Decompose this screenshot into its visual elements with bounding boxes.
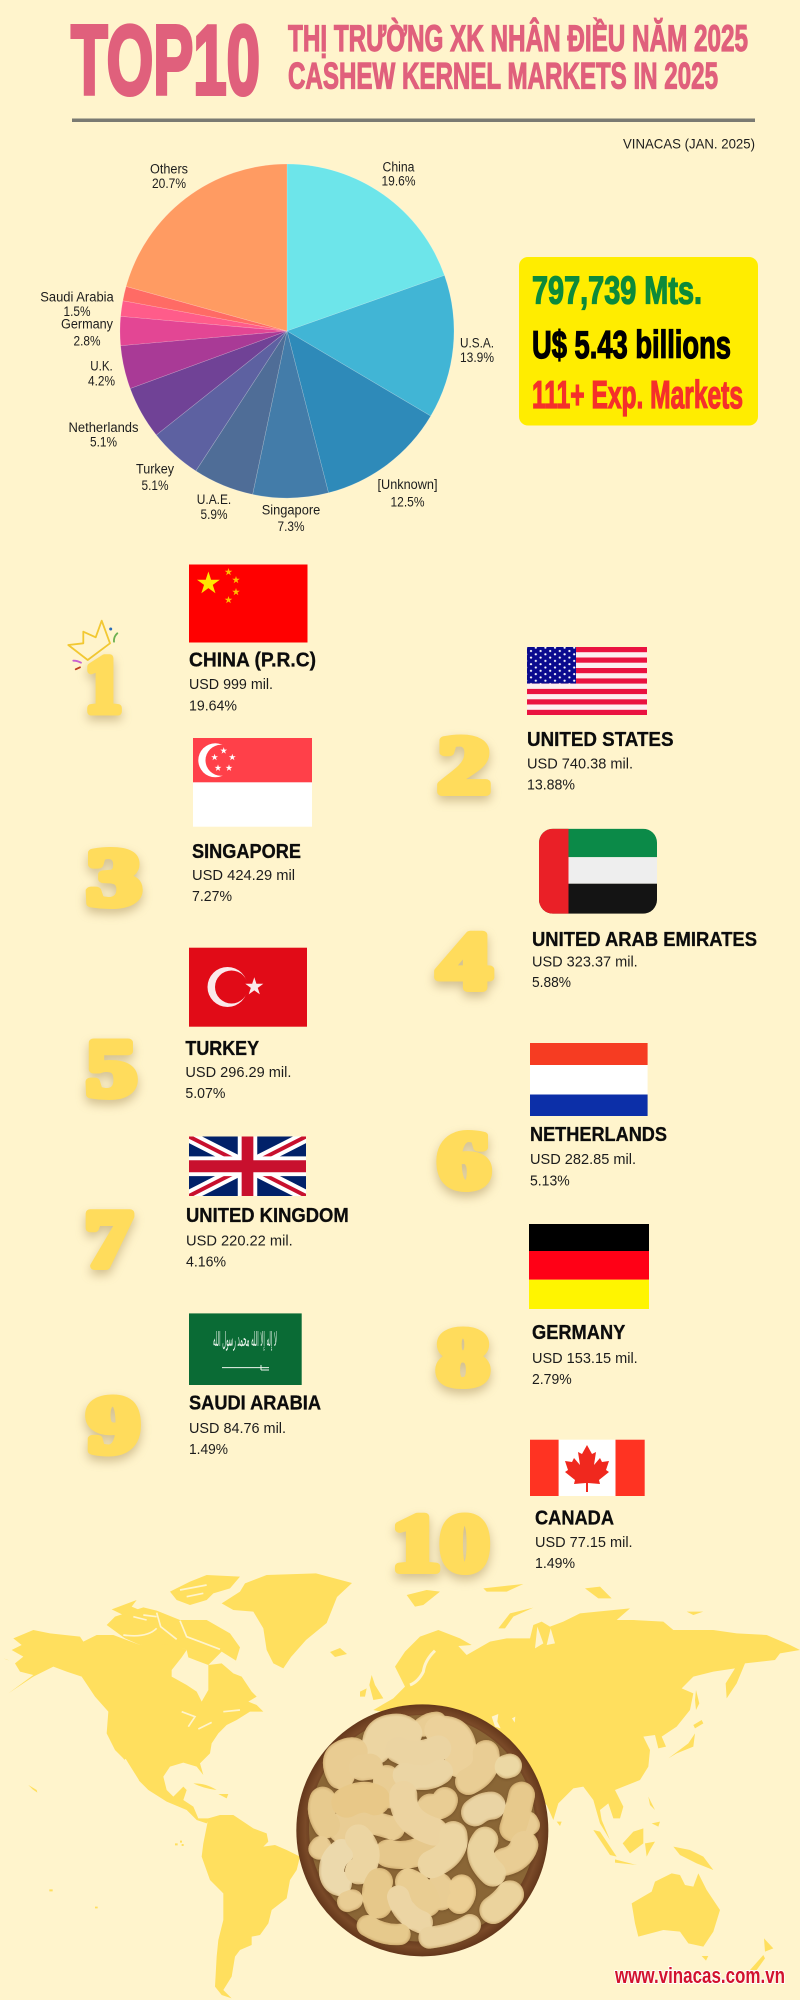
- rank 1: 1: [85, 642, 122, 730]
- text: United Kingdom: 4.16%: [186, 1254, 226, 1270]
- entry 8: Germany: [437, 1224, 649, 1402]
- text: Netherlands: NETHERLANDS: [530, 1124, 667, 1146]
- text: United Kingdom: UNITED KINGDOM: [186, 1205, 349, 1227]
- text: Germany: [532, 1322, 638, 1388]
- text: UAE: [532, 929, 757, 991]
- rank 2: 2: [438, 722, 490, 810]
- flag: Germany: [529, 1224, 649, 1309]
- entry 1: China: [68, 564, 316, 730]
- flag: Saudi Arabia: [189, 1313, 302, 1385]
- entry 4: United Arab Emirates: [438, 829, 757, 1006]
- text: Saudi Arabia: [189, 1393, 321, 1458]
- text: Singapore: USD 424.29 mil: [192, 867, 295, 884]
- flag: United States: [527, 647, 647, 715]
- flag: Singapore: [193, 738, 312, 827]
- flag: Netherlands: [530, 1043, 648, 1116]
- text: لا إله إلا الله محمد رسول الله: [213, 1327, 277, 1352]
- callout: totals: [519, 257, 758, 426]
- text: Germany: 2.79%: [532, 1371, 572, 1388]
- pie labels: 5.1%: [142, 478, 168, 493]
- text: Canada: USD 77.15 mil.: [535, 1534, 633, 1551]
- text: Turkey: [185, 1038, 291, 1102]
- rank 6: 6: [438, 1117, 490, 1205]
- text: Singapore: SINGAPORE: [192, 841, 301, 863]
- pie labels: Singapore: [262, 502, 320, 518]
- text: United States: USD 740.38 mil.: [527, 755, 633, 772]
- text: UAE: UNITED ARAB EMIRATES: [532, 929, 757, 951]
- flag: Canada: [530, 1440, 645, 1496]
- text: Saudi Arabia: USD 84.76 mil.: [189, 1420, 286, 1437]
- pie labels: 19.6%: [382, 174, 416, 188]
- rank 7: 7: [85, 1196, 132, 1284]
- source note: VINACAS (JAN. 2025): [623, 136, 755, 152]
- pie labels: U.K.: [90, 358, 113, 374]
- text: China: 19.64%: [189, 698, 237, 715]
- pie labels: [40, 160, 494, 534]
- text: UAE: 5.88%: [532, 974, 571, 991]
- text: Turkey: TURKEY: [185, 1038, 260, 1060]
- world map: [3, 1573, 800, 1998]
- pie labels: China: [382, 160, 415, 174]
- pie labels: 2.8%: [74, 334, 100, 348]
- pie labels: 13.9%: [460, 350, 494, 365]
- text: Netherlands: 5.13%: [530, 1172, 570, 1190]
- text: Singapore: [192, 841, 301, 905]
- header: [71, 5, 748, 115]
- text: United States: [527, 729, 674, 793]
- flag: United Kingdom: [189, 1136, 306, 1196]
- crown icon: [68, 621, 117, 669]
- text: United Kingdom: [186, 1205, 349, 1270]
- pie labels: 20.7%: [152, 176, 186, 191]
- rank 3: 3: [87, 834, 141, 922]
- text: Singapore: 7.27%: [192, 888, 232, 905]
- entry 3: Singapore: [87, 738, 312, 922]
- text: China: [189, 650, 316, 715]
- callout: totals: 797,739 Mts.: [532, 270, 702, 312]
- pie labels: Netherlands: [68, 420, 139, 435]
- text: Turkey: 5.07%: [185, 1085, 225, 1102]
- pie chart: market shares: [120, 164, 454, 498]
- rank 5: 5: [86, 1025, 136, 1113]
- pie labels: 5.9%: [200, 507, 228, 522]
- text: United States: 13.88%: [527, 776, 575, 793]
- title: TOP10: TOP10: [71, 5, 260, 115]
- flag: UAE: [539, 828, 657, 914]
- text: China: USD 999 mil.: [189, 676, 273, 693]
- pie labels: Germany: [61, 316, 113, 332]
- rank 4: 4: [438, 918, 491, 1006]
- text: United Kingdom: USD 220.22 mil.: [186, 1232, 293, 1250]
- pie labels: 12.5%: [390, 494, 424, 510]
- text: Germany: GERMANY: [532, 1322, 626, 1344]
- text: United States: UNITED STATES: [527, 729, 674, 751]
- entry 7: United Kingdom: [85, 1136, 349, 1284]
- pie labels: [Unknown]: [378, 477, 438, 492]
- text: Netherlands: USD 282.85 mil.: [530, 1151, 636, 1168]
- entry 10: Canada: [392, 1440, 645, 1588]
- text: UAE: USD 323.37 mil.: [532, 953, 638, 970]
- entry 9: Saudi Arabia: [88, 1313, 321, 1470]
- rank 10: 10: [392, 1500, 489, 1588]
- entry 6: Netherlands: [438, 1043, 667, 1205]
- text: China: CHINA (P.R.C): [189, 650, 316, 672]
- pie labels: 5.1%: [90, 434, 117, 450]
- pie labels: 7.3%: [278, 519, 304, 534]
- text: Germany: USD 153.15 mil.: [532, 1350, 638, 1367]
- pie labels: 1.5%: [64, 304, 90, 319]
- entry 5: Turkey: [86, 948, 307, 1113]
- flag: China: [189, 564, 308, 642]
- entry 2: United States: [438, 647, 674, 810]
- rank 9: 9: [88, 1382, 140, 1470]
- text: Canada: CANADA: [535, 1508, 614, 1530]
- pie labels: U.S.A.: [460, 336, 494, 350]
- rank 8: 8: [437, 1314, 489, 1402]
- flag: Turkey: [189, 948, 307, 1027]
- pie labels: 4.2%: [88, 374, 115, 388]
- pie labels: U.A.E.: [197, 492, 231, 507]
- text: Turkey: USD 296.29 mil.: [185, 1064, 291, 1081]
- pie labels: Others: [150, 162, 188, 176]
- text: Saudi Arabia: SAUDI ARABIA: [189, 1393, 321, 1415]
- illustration: bowl of cashews: [296, 1704, 548, 1956]
- text: Netherlands: [530, 1124, 667, 1190]
- text: Canada: 1.49%: [535, 1555, 575, 1572]
- pie labels: Saudi Arabia: [40, 290, 114, 304]
- text: Canada: [535, 1508, 633, 1572]
- pie labels: Turkey: [136, 462, 174, 476]
- text: Saudi Arabia: 1.49%: [189, 1441, 228, 1458]
